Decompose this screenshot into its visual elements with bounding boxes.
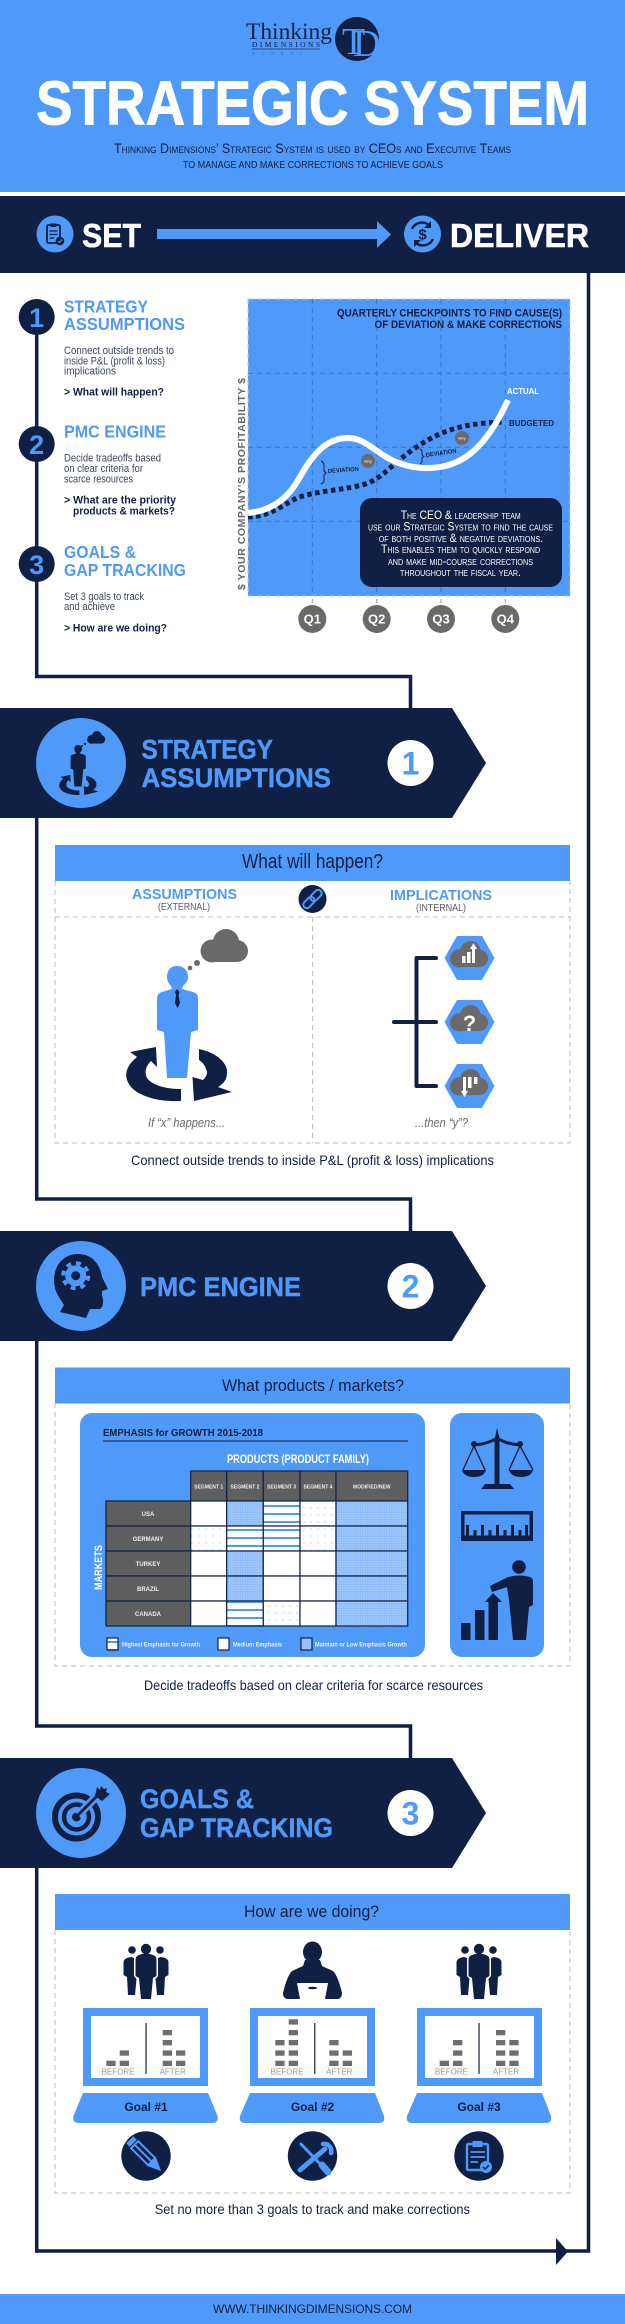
banner: pmc engine: [0, 1231, 486, 1341]
panel: what will happen: [55, 845, 570, 1143]
goal 3: AFTER: [493, 2068, 519, 2076]
icon: hexagon decline: [444, 1064, 494, 1108]
goal 1: [73, 1944, 218, 2181]
icon: ruler: [461, 1511, 533, 1541]
chart title: OF DEVIATION & MAKE CORRECTIONS: [374, 319, 562, 331]
matrix panel: SEGMENT 1: [194, 1484, 223, 1490]
overview step 2: 2: [29, 430, 44, 460]
icon: hexagon question: [444, 1000, 494, 1044]
icon: hexagon growth: [444, 936, 494, 980]
deliver label: DELIVER: [450, 217, 589, 254]
panel: what will happen: If “x” happens...: [148, 1115, 225, 1130]
logo: Thinking Dimensions: T: [342, 21, 365, 63]
footer: [0, 2294, 625, 2324]
implications column heading: (INTERNAL): [416, 903, 466, 914]
icon: team: [456, 1944, 502, 1999]
deviation markers: why: [457, 436, 467, 440]
matrix panel: PRODUCTS (PRODUCT FAMILY): [227, 1454, 369, 1466]
banner: pmc engine: PMC ENGINE: [140, 1272, 301, 1302]
banner: goals and gap tracking: [0, 1758, 486, 1868]
chart: quarterly checkpoints: [236, 299, 570, 633]
goal 1: Goal #1: [124, 2100, 168, 2114]
banner: strategy assumptions: STRATEGY: [142, 734, 273, 764]
set label: SET: [82, 217, 141, 254]
legend: [107, 1638, 407, 1650]
overview step 1: ASSUMPTIONS: [64, 314, 185, 334]
goal 3: Goal #3: [457, 2100, 501, 2114]
icon: hexagon question: ?: [463, 1011, 476, 1036]
overview step 3: GOALS &: [64, 542, 136, 562]
matrix panel: MODIFIED/NEW: [353, 1484, 391, 1490]
overview step 2: products & markets?: [73, 505, 175, 517]
matrix cells: [191, 1501, 408, 1626]
banner: goals and gap tracking: GAP TRACKING: [140, 1813, 333, 1843]
goal 3: BEFORE: [435, 2068, 468, 2076]
overview step 2: Decide tradeoffs based: [64, 453, 161, 465]
banner: strategy assumptions: ASSUMPTIONS: [142, 763, 331, 793]
icon: tools: [300, 2144, 331, 2172]
panel: what will happen: ...then “y”?: [415, 1115, 469, 1130]
matrix panel: SEGMENT 3: [267, 1484, 296, 1490]
deviation markers: why: [363, 458, 373, 464]
icon: person at laptop: [283, 1942, 342, 1999]
series labels: [507, 386, 554, 428]
callout: CEO and leadership: The CEO & leadership team: [401, 508, 521, 522]
legend: Medium Emphasis: [233, 1642, 282, 1648]
icon: dollar cycle: $: [418, 226, 427, 244]
goal 3: [407, 1944, 551, 2181]
callout: CEO and leadership: This enables them to quickly respond: [381, 542, 540, 556]
overview step 1: 1: [29, 303, 44, 333]
quarter markers: Q4: [497, 612, 515, 626]
column headers: [191, 1471, 408, 1501]
logo: Thinking Dimensions: [246, 17, 380, 65]
callout: CEO and leadership: of both positive & negative deviations.: [379, 531, 543, 545]
icon: link: [298, 885, 326, 913]
quarter markers: Q2: [368, 612, 385, 626]
logo: Thinking Dimensions: D: [353, 23, 380, 65]
overview step 3: > How are we doing?: [64, 623, 167, 635]
goal 2: [240, 1942, 384, 2181]
footer: WWW.THINKINGDIMENSIONS.COM: [213, 2302, 412, 2316]
banner: goals and gap tracking: GOALS &: [140, 1784, 254, 1814]
overview step 1: > What will happen?: [64, 387, 164, 399]
overview step 3: and achieve: [64, 601, 115, 613]
deviation markers: [321, 431, 469, 484]
icon: clipboard: [467, 2141, 492, 2173]
matrix panel: USA: [142, 1512, 155, 1518]
header band: [0, 0, 625, 192]
assumptions column heading: [132, 886, 237, 913]
overview step 1: STRATEGY: [64, 296, 148, 316]
overview step 2: PMC ENGINE: [64, 422, 166, 442]
matrix panel: GERMANY: [133, 1537, 163, 1543]
caption: section three: Set no more than 3 goals to track and make corrections: [155, 2201, 470, 2217]
quarter markers: Q3: [432, 612, 450, 626]
legend: Highest Emphasis for Growth: [122, 1642, 200, 1648]
callout: CEO and leadership: use our Strategic System to find the cause: [368, 520, 553, 534]
chart title: QUARTERLY CHECKPOINTS TO FIND CAUSE(S): [337, 308, 562, 320]
icon: team: [124, 1944, 168, 1999]
banner: strategy assumptions: 1: [402, 746, 419, 782]
icon: man with growth bars: [461, 1560, 533, 1640]
assumptions column heading: ASSUMPTIONS: [132, 886, 237, 903]
matrix panel: SEGMENT 4: [304, 1484, 333, 1490]
goal 2: Goal #2: [291, 2100, 334, 2114]
banner: pmc engine: 2: [402, 1268, 419, 1304]
panel: what products markets: What products / markets?: [222, 1376, 404, 1395]
quarter markers: Q1: [304, 612, 321, 626]
chart title: [337, 308, 562, 331]
assumptions column heading: (EXTERNAL): [158, 902, 210, 913]
actual line: [248, 400, 508, 513]
connector lines: [37, 273, 588, 2251]
goal 2: AFTER: [326, 2068, 353, 2076]
callout: CEO and leadership: [360, 498, 562, 587]
matrix panel: SEGMENT 2: [231, 1484, 260, 1490]
series labels: BUDGETED: [509, 418, 554, 428]
overview step 2: scarce resources: [64, 473, 133, 485]
legend: Maintain or Low Emphasis Growth: [315, 1642, 407, 1648]
panel: what will happen: What will happen?: [242, 851, 383, 873]
logo: Thinking Dimensions: Thinking: [246, 19, 332, 44]
matrix panel: BRAZIL: [137, 1587, 159, 1593]
overview step 1: inside P&L (profit & loss): [64, 356, 165, 368]
overview step 1: [19, 296, 185, 399]
subtitle: TO MANAGE AND MAKE CORRECTIONS TO ACHIEVE GOALS: [183, 160, 443, 171]
series labels: ACTUAL: [507, 386, 539, 396]
matrix panel: [80, 1413, 425, 1657]
overview step 2: [19, 422, 177, 517]
matrix panel: TURKEY: [136, 1562, 160, 1568]
bracket: [394, 958, 436, 1086]
goal 1: AFTER: [160, 2068, 186, 2076]
panel: how are we doing: [55, 1894, 570, 2193]
icon: target: [55, 1786, 110, 1838]
icon: thinking person: [126, 929, 248, 1101]
set to deliver band: [0, 196, 625, 273]
panel: how are we doing: How are we doing?: [244, 1902, 379, 1921]
icon: thinking person small: [59, 731, 105, 795]
overview step 3: 3: [29, 550, 44, 580]
implications column heading: IMPLICATIONS: [390, 887, 492, 904]
matrix panel: CANADA: [135, 1612, 162, 1618]
caption: section two: Decide tradeoffs based on clear criteria for scarce resources: [144, 1677, 483, 1693]
deviation markers: DEVIATION: [425, 449, 457, 459]
quarter markers: [298, 605, 519, 633]
banner: strategy assumptions: [0, 708, 486, 818]
callout: CEO and leadership: throughout the fiscal year.: [400, 565, 521, 579]
overview step 1: Connect outside trends to: [64, 345, 174, 357]
criteria panel: [450, 1413, 544, 1657]
overview step 1: implications: [64, 366, 116, 378]
deviation markers: DEVIATION: [328, 467, 359, 475]
budgeted line: [248, 422, 505, 517]
row headers: [106, 1501, 191, 1626]
logo: Thinking Dimensions: DIMENSIONS: [252, 40, 320, 49]
icon: pencil: [126, 2136, 163, 2173]
icon: dollar cycle: [404, 216, 441, 252]
goal 1: BEFORE: [102, 2068, 134, 2076]
goal 2: BEFORE: [271, 2068, 303, 2076]
overview step 2: > What are the priority: [64, 494, 177, 506]
overview step 2: on clear criteria for: [64, 463, 143, 475]
panel: what products markets: [55, 1368, 570, 1666]
subtitle: [114, 141, 511, 171]
arrow: final head: [556, 2238, 568, 2265]
arrow: set to deliver: [157, 221, 391, 248]
callout: CEO and leadership: and make mid-course corrections: [388, 554, 533, 568]
subtitle: Thinking Dimensions’ Strategic System is used by CEOs and Executive Teams: [114, 141, 511, 156]
implications column heading: [390, 887, 492, 914]
overview step 3: Set 3 goals to track: [64, 591, 144, 603]
overview step 3: GAP TRACKING: [64, 560, 186, 580]
matrix panel: MARKETS: [93, 1545, 105, 1590]
icon: head with gear: [54, 1254, 108, 1318]
overview step 3: [19, 542, 186, 635]
caption: section one: Connect outside trends to inside P&L (profit & loss) implications: [131, 1152, 494, 1168]
icon: clipboard: [36, 216, 74, 252]
matrix panel: EMPHASIS for GROWTH 2015-2018: [103, 1428, 263, 1439]
icon: scales: [462, 1428, 533, 1489]
banner: goals and gap tracking: 3: [402, 1796, 419, 1832]
y axis label: $ YOUR COMPANY’S PROFITABILITY $: [236, 378, 248, 590]
logo: Thinking Dimensions: GLOBAL: [252, 52, 302, 56]
